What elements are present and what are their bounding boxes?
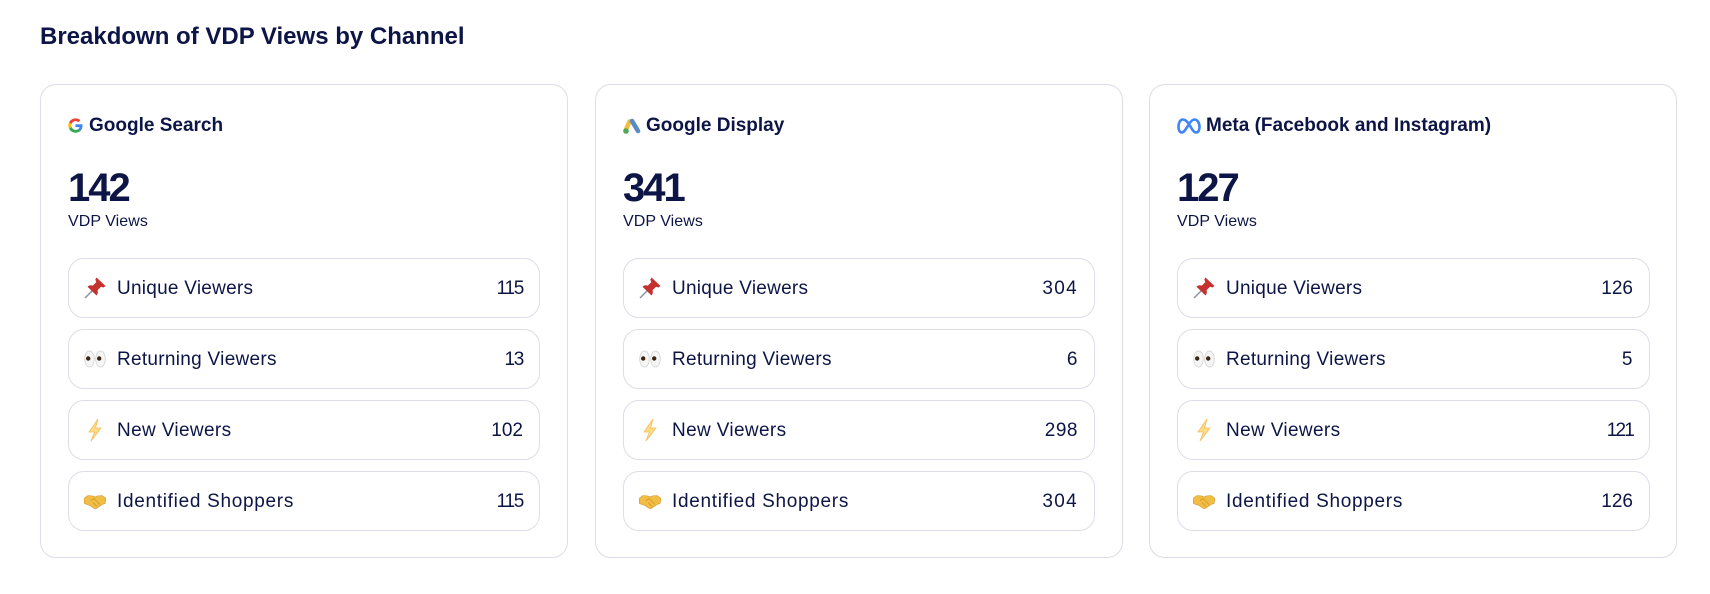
row: New Viewers (1177, 400, 1650, 460)
row: Identified Shoppers (623, 470, 1095, 530)
metric label: VDP Views (68, 212, 148, 230)
row: Returning Viewers: 6 (1067, 348, 1078, 370)
row: Unique Viewers (623, 258, 1095, 318)
row: New Viewers (623, 400, 1095, 460)
channel heading: Google Search: Google Search (89, 114, 223, 136)
row: Returning Viewers: 13 (504, 348, 523, 370)
title: Breakdown of VDP Views by Channel (40, 23, 465, 50)
row: Returning Viewers: Returning Viewers (672, 348, 832, 370)
metric: VDP views total: 341 (623, 166, 684, 210)
channel heading: Meta (Facebook and Instagram): Meta (Facebook and Instagram) (1206, 114, 1491, 136)
row: Returning Viewers: Returning Viewers (117, 348, 277, 370)
row: Unique Viewers: Unique Viewers (1226, 278, 1362, 298)
row: Identified Shoppers (68, 470, 540, 530)
row: Returning Viewers (68, 328, 540, 388)
row: Unique Viewers: Unique Viewers (672, 278, 808, 298)
row: Identified Shoppers: 115 (497, 490, 523, 512)
row: New Viewers: 121 (1607, 420, 1633, 440)
row: Unique Viewers: Unique Viewers (117, 278, 253, 298)
row: Unique Viewers: 304 (1042, 278, 1078, 298)
row: Identified Shoppers: Identified Shoppers (117, 490, 294, 512)
row: New Viewers: New Viewers (672, 420, 786, 440)
row: Unique Viewers (68, 258, 540, 318)
row: New Viewers: 102 (491, 420, 523, 440)
row: Unique Viewers: 115 (497, 278, 523, 298)
row: Identified Shoppers: Identified Shoppers (672, 490, 849, 512)
row: Identified Shoppers (1177, 470, 1650, 530)
channel heading: Google Display: Google Display (646, 114, 784, 136)
row: Identified Shoppers: Identified Shoppers (1226, 490, 1403, 512)
row: Returning Viewers: Returning Viewers (1226, 348, 1386, 370)
panel: Meta (1149, 84, 1677, 558)
row: Returning Viewers (1177, 328, 1650, 388)
row: Unique Viewers (1177, 258, 1650, 318)
metric label: VDP Views (623, 212, 703, 230)
row: Unique Viewers: 126 (1601, 278, 1633, 298)
row: New Viewers: New Viewers (117, 420, 231, 440)
metric: VDP views total: 127 (1177, 166, 1238, 210)
row: New Viewers: New Viewers (1226, 420, 1340, 440)
row: New Viewers: 298 (1045, 420, 1078, 440)
panel: Google Search (40, 84, 568, 558)
row: Identified Shoppers: 304 (1042, 490, 1078, 512)
row: Returning Viewers: 5 (1622, 348, 1633, 370)
row: Identified Shoppers: 126 (1601, 490, 1633, 512)
row: Returning Viewers (623, 328, 1095, 388)
row: New Viewers (68, 400, 540, 460)
metric: VDP views total: 142 (68, 166, 129, 210)
metric label: VDP Views (1177, 212, 1257, 230)
panel: Google Display (595, 84, 1123, 558)
